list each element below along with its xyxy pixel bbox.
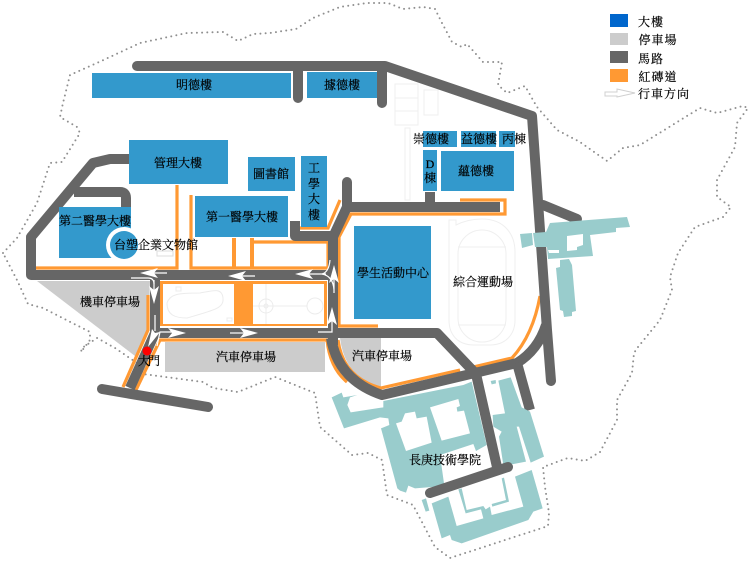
arrow: west middle (228, 271, 255, 281)
parking: motorcycle (37, 281, 150, 356)
label: Mingde: 明德樓 (176, 77, 213, 92)
label: Museum: 台塑企業文物館 (114, 237, 198, 252)
building: Medical 1 (195, 196, 288, 237)
legend: brick walkway: 紅磚道 (638, 69, 678, 84)
label: Engineering vertical: 工 (308, 161, 320, 175)
road to institute (430, 374, 508, 493)
label: Engineering vertical (308, 161, 321, 222)
label: D vertical (424, 157, 436, 185)
building: Student Activity Center (354, 226, 431, 319)
label: Engineering vertical: 大 (308, 191, 320, 206)
legend: road: 馬路 (638, 52, 664, 66)
label: Yide: 益德樓 (461, 131, 498, 146)
legend (605, 14, 690, 101)
arrow: west top-left (131, 268, 167, 284)
label: Engineering vertical: 樓 (308, 207, 321, 222)
legend: driving direction: 行車方向 (638, 86, 690, 101)
building: Yunde (441, 151, 514, 191)
parking: car lot east (340, 338, 381, 388)
courtyard garden outlines (167, 284, 323, 324)
label: Car parking south: 汽車停車場 (216, 349, 276, 364)
label: Library: 圖書館 (253, 166, 289, 181)
building: Bing (499, 131, 515, 147)
label: Management: 管理大樓 (154, 155, 203, 170)
building: Mingde (92, 73, 291, 98)
building: Chongde (423, 131, 457, 147)
building: Jude (307, 72, 377, 98)
faint building outlines (157, 84, 515, 345)
arrow: east from gate (157, 328, 186, 346)
building: Engineering (301, 156, 327, 227)
teal buildings: Chang Gung Institute of Technology (332, 377, 544, 543)
label: Chongde: 崇德樓 (413, 131, 450, 146)
label: D vertical: D (426, 157, 435, 171)
building: Management (129, 140, 228, 184)
label: Yunde: 蘊德樓 (458, 163, 495, 178)
parking areas (37, 281, 381, 388)
label: Medical 1: 第一醫學大樓 (206, 209, 279, 224)
building: Library (248, 157, 295, 191)
central courtyard blocks (160, 281, 327, 326)
building: Formosa museum circle (106, 227, 142, 263)
brick walkways (36, 185, 540, 390)
teal buildings: east block (520, 217, 630, 317)
label: D vertical: 棟 (424, 170, 436, 185)
arrow: north from lower road (318, 307, 337, 332)
buildings (59, 72, 515, 319)
roads (31, 66, 577, 410)
label: Motorcycle parking: 機車停車場 (80, 294, 140, 309)
arrow: south (149, 280, 159, 304)
arrow: toward main gate (148, 315, 160, 347)
label: Institute: 長庚技術學院 (409, 452, 481, 467)
label: Sports field: 綜合運動場 (453, 274, 513, 289)
parking: car lot south (165, 342, 325, 372)
arrow: west at junction (295, 260, 330, 279)
label: Jude: 據德樓 (324, 77, 361, 92)
main gate marker (142, 346, 152, 356)
traffic direction arrows (131, 260, 339, 347)
label: Engineering vertical: 學 (308, 177, 320, 191)
arrow: north at junction (322, 265, 339, 293)
arrow: east middle (230, 328, 258, 338)
building: Yide (461, 131, 496, 147)
legend: parking: 停車場 (638, 32, 678, 47)
legend: building: 大樓 (638, 14, 664, 29)
label: Bing: 丙棟 (502, 131, 526, 146)
building: D (423, 150, 437, 191)
label: Student Activity Center: 學生活動中心 (357, 265, 430, 280)
building: Medical 2 (59, 207, 131, 258)
map labels (59, 77, 526, 467)
label: Car parking east: 汽車停車場 (352, 348, 412, 363)
label: Main gate: 大門 (138, 353, 160, 368)
label: Medical 2: 第二醫學大樓 (59, 213, 132, 228)
